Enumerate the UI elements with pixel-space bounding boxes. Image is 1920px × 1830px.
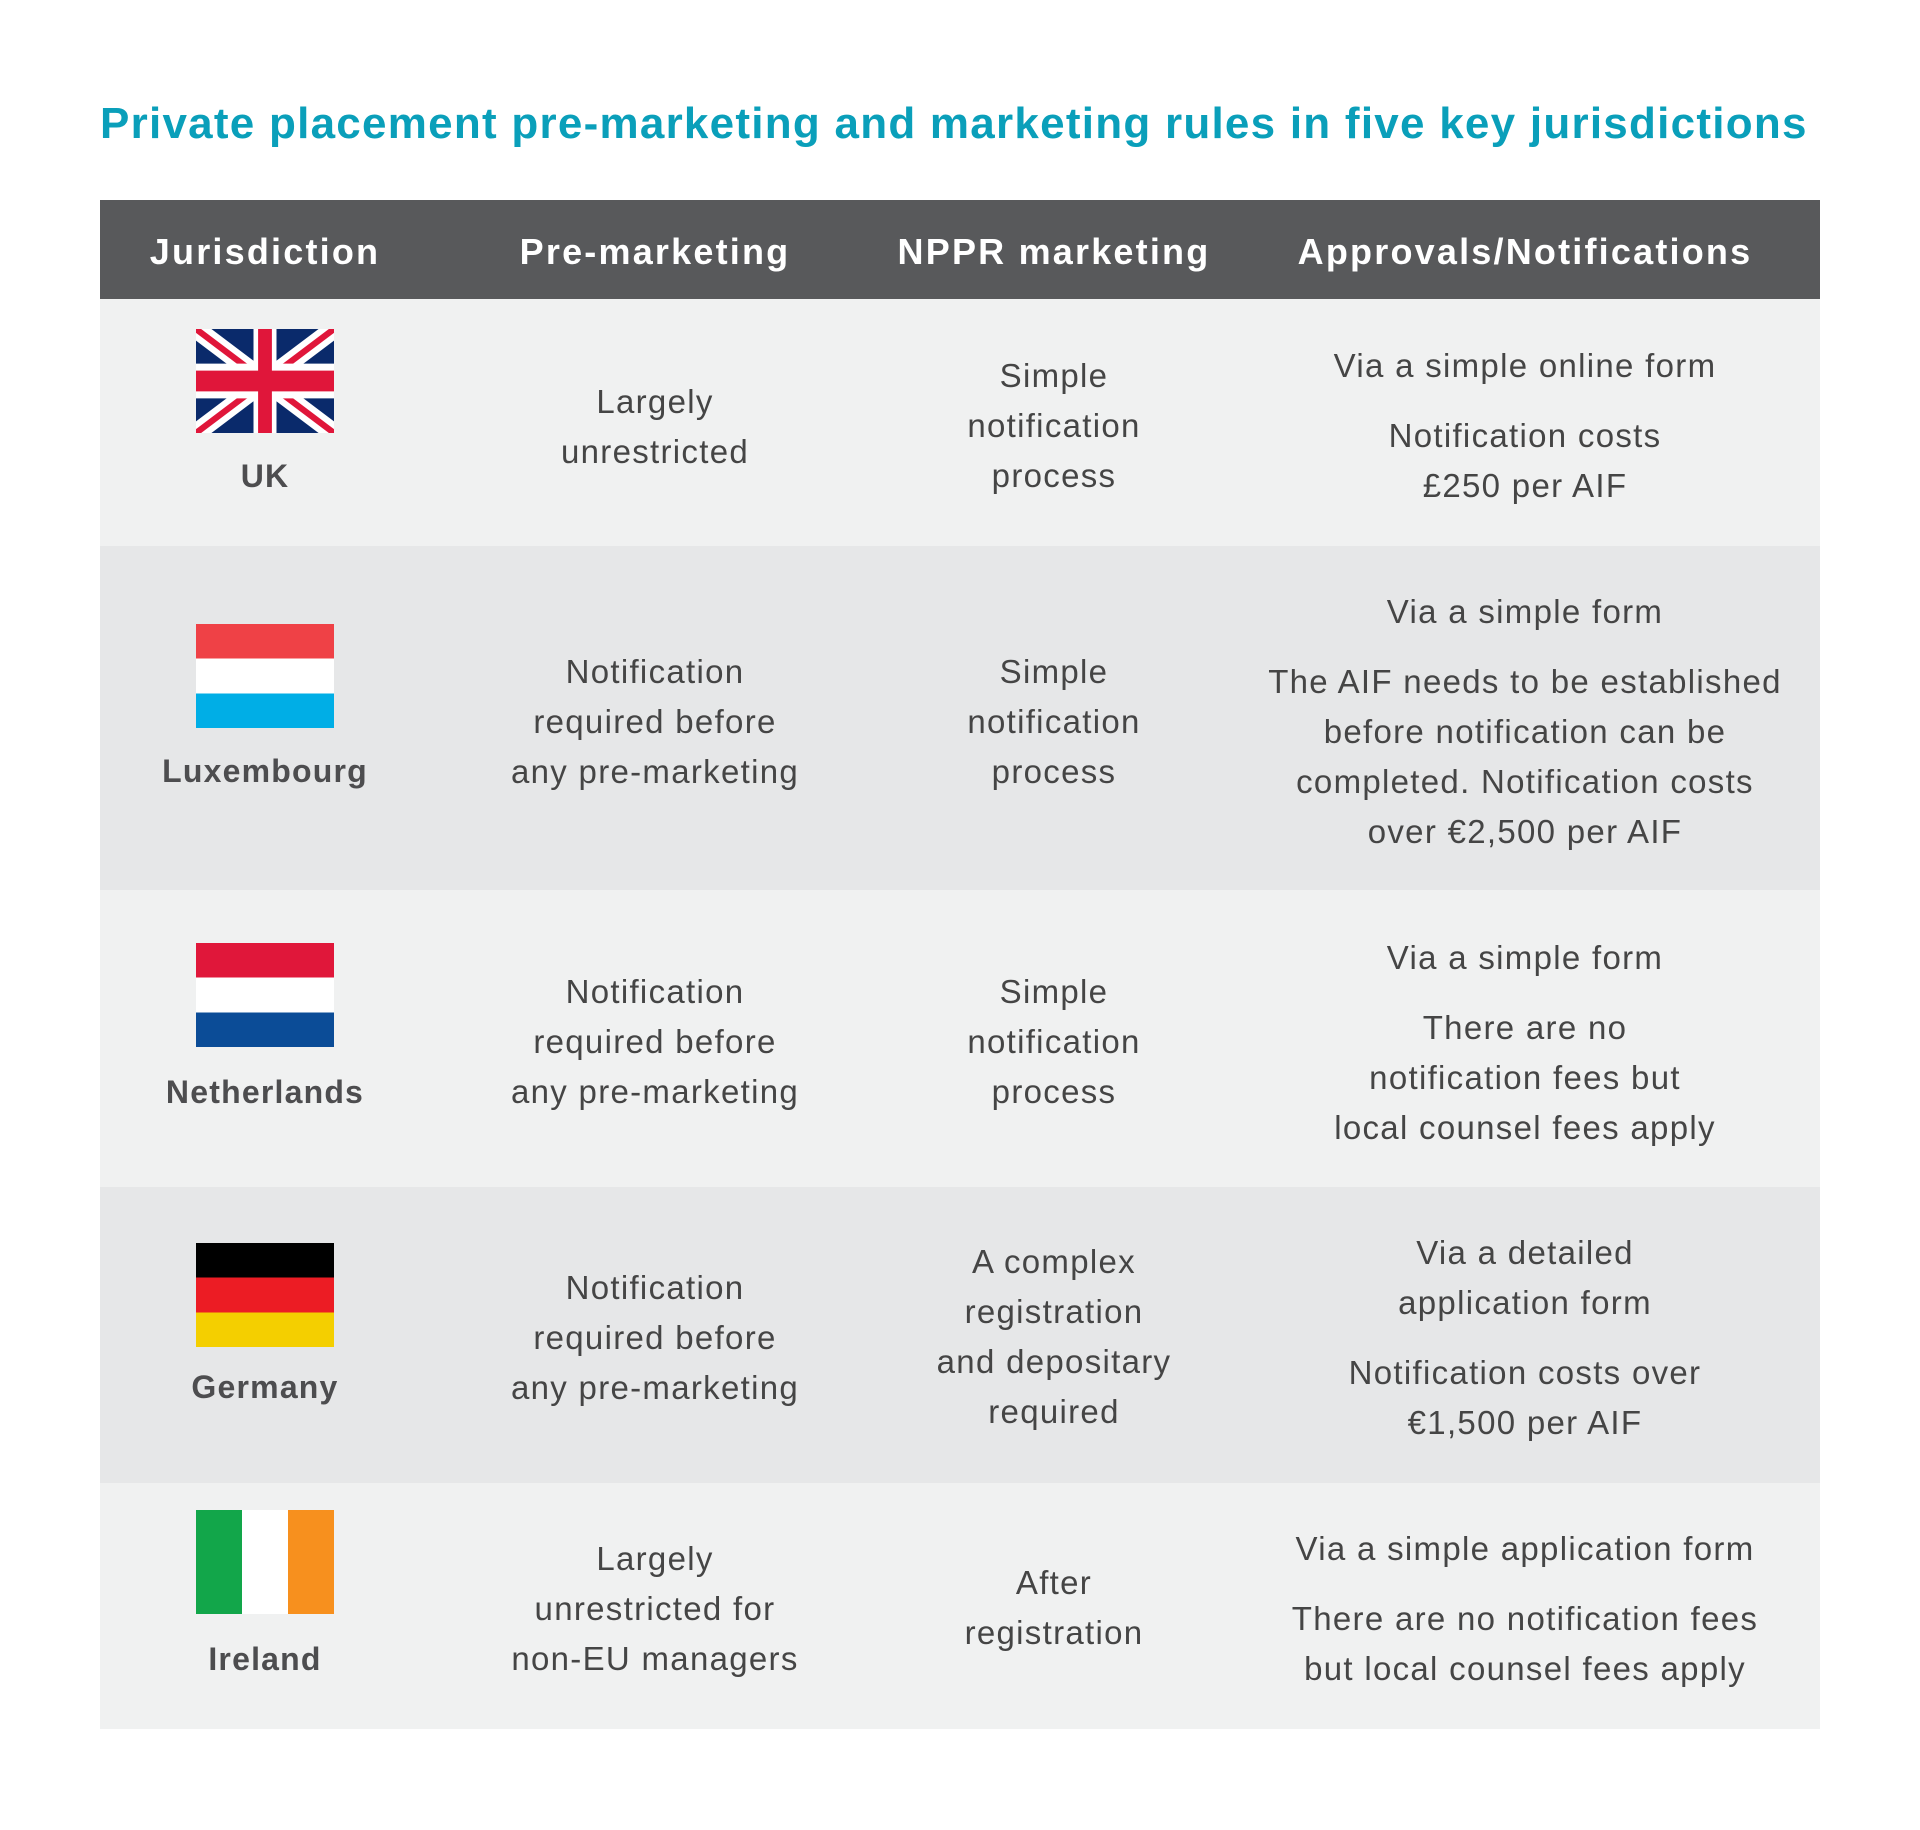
UK pre-marketing: Largely	[596, 383, 714, 420]
NL NPPR: Simple	[1000, 973, 1108, 1010]
Lux approvals: before notification can be	[1324, 713, 1726, 750]
NL pre-marketing: required before	[533, 1023, 777, 1060]
IE approvals: Via a simple application form There are no notification fees	[1292, 1530, 1758, 1637]
row: Ireland	[100, 1483, 1820, 1729]
header row	[100, 200, 1820, 299]
Lux approvals: over €2,500 per AIF	[1368, 813, 1682, 850]
DE NPPR	[937, 1243, 1171, 1430]
IE pre-marketing	[511, 1540, 799, 1677]
DE approvals: Via a detailed	[1416, 1234, 1634, 1271]
Lux pre-marketing	[511, 653, 799, 790]
IE approvals: but local counsel fees apply	[1304, 1650, 1746, 1687]
UK approvals	[1334, 347, 1716, 504]
row: UK	[100, 299, 1820, 546]
DE pre-marketing: any pre-marketing	[511, 1369, 799, 1406]
DE NPPR: registration	[965, 1293, 1143, 1330]
DE pre-marketing: required before	[533, 1319, 777, 1356]
flag: Luxembourg	[196, 624, 334, 728]
Lux NPPR: Simple	[1000, 653, 1108, 690]
UK pre-marketing: unrestricted	[561, 433, 749, 470]
title: Private placement pre-marketing and marketing rules in five key jurisdictions	[100, 99, 1808, 148]
IE approvals	[1292, 1530, 1758, 1687]
DE approvals	[1349, 1234, 1701, 1441]
DE approvals: €1,500 per AIF	[1408, 1404, 1642, 1441]
DE NPPR: and depositary	[937, 1343, 1171, 1380]
NL pre-marketing	[511, 973, 799, 1110]
table	[100, 200, 1820, 1729]
UK NPPR	[967, 357, 1141, 494]
Lux pre-marketing: required before	[533, 703, 777, 740]
NL NPPR	[967, 973, 1141, 1110]
header: jurisdiction: Jurisdiction	[150, 231, 380, 272]
UK NPPR: Simple	[1000, 357, 1108, 394]
Lux approvals	[1268, 593, 1782, 850]
NL approvals	[1334, 939, 1716, 1146]
Lux pre-marketing: Notification	[566, 653, 744, 690]
flag: Germany	[196, 1243, 334, 1347]
DE approvals: application form Notification costs over	[1349, 1284, 1701, 1391]
row: Germany	[100, 1187, 1820, 1483]
NL approvals: Via a simple form There are no	[1387, 939, 1663, 1046]
IE pre-marketing: Largely	[596, 1540, 714, 1577]
UK NPPR: process	[992, 457, 1116, 494]
NL NPPR: notification	[967, 1023, 1141, 1060]
Lux NPPR: process	[992, 753, 1116, 790]
UK pre-marketing	[561, 383, 749, 470]
header: NPPR marketing: NPPR marketing	[898, 231, 1210, 272]
DE NPPR: A complex	[972, 1243, 1136, 1280]
row: Luxembourg	[100, 546, 1820, 890]
IE NPPR	[965, 1564, 1143, 1651]
DE pre-marketing	[511, 1269, 799, 1406]
IE NPPR: After	[1016, 1564, 1092, 1601]
flag: Ireland	[196, 1510, 334, 1614]
label: Germany: Germany	[191, 1369, 339, 1405]
header: pre-marketing: Pre-marketing	[520, 231, 790, 272]
Lux NPPR	[967, 653, 1141, 790]
NL approvals: local counsel fees apply	[1334, 1109, 1716, 1146]
NL NPPR: process	[992, 1073, 1116, 1110]
NL pre-marketing: any pre-marketing	[511, 1073, 799, 1110]
label: Luxembourg: Luxembourg	[162, 753, 368, 789]
Lux approvals: completed. Notification costs	[1296, 763, 1754, 800]
Lux pre-marketing: any pre-marketing	[511, 753, 799, 790]
label: UK: UK	[241, 458, 289, 494]
flag: UK	[196, 329, 334, 433]
label: Netherlands: Netherlands	[166, 1074, 364, 1110]
flag: Netherlands	[196, 943, 334, 1047]
header: approvals: Approvals/Notifications	[1298, 231, 1752, 272]
DE NPPR: required	[988, 1393, 1120, 1430]
label: Ireland: Ireland	[208, 1641, 322, 1677]
IE NPPR: registration	[965, 1614, 1143, 1651]
UK NPPR: notification	[967, 407, 1141, 444]
UK approvals: Via a simple online form Notification costs	[1334, 347, 1716, 454]
IE pre-marketing: non-EU managers	[511, 1640, 799, 1677]
UK approvals: £250 per AIF	[1423, 467, 1627, 504]
NL pre-marketing: Notification	[566, 973, 744, 1010]
DE pre-marketing: Notification	[566, 1269, 744, 1306]
Lux NPPR: notification	[967, 703, 1141, 740]
Lux approvals: Via a simple form The AIF needs to be established	[1268, 593, 1782, 700]
row: Netherlands	[100, 890, 1820, 1187]
IE pre-marketing: unrestricted for	[535, 1590, 775, 1627]
NL approvals: notification fees but	[1369, 1059, 1681, 1096]
